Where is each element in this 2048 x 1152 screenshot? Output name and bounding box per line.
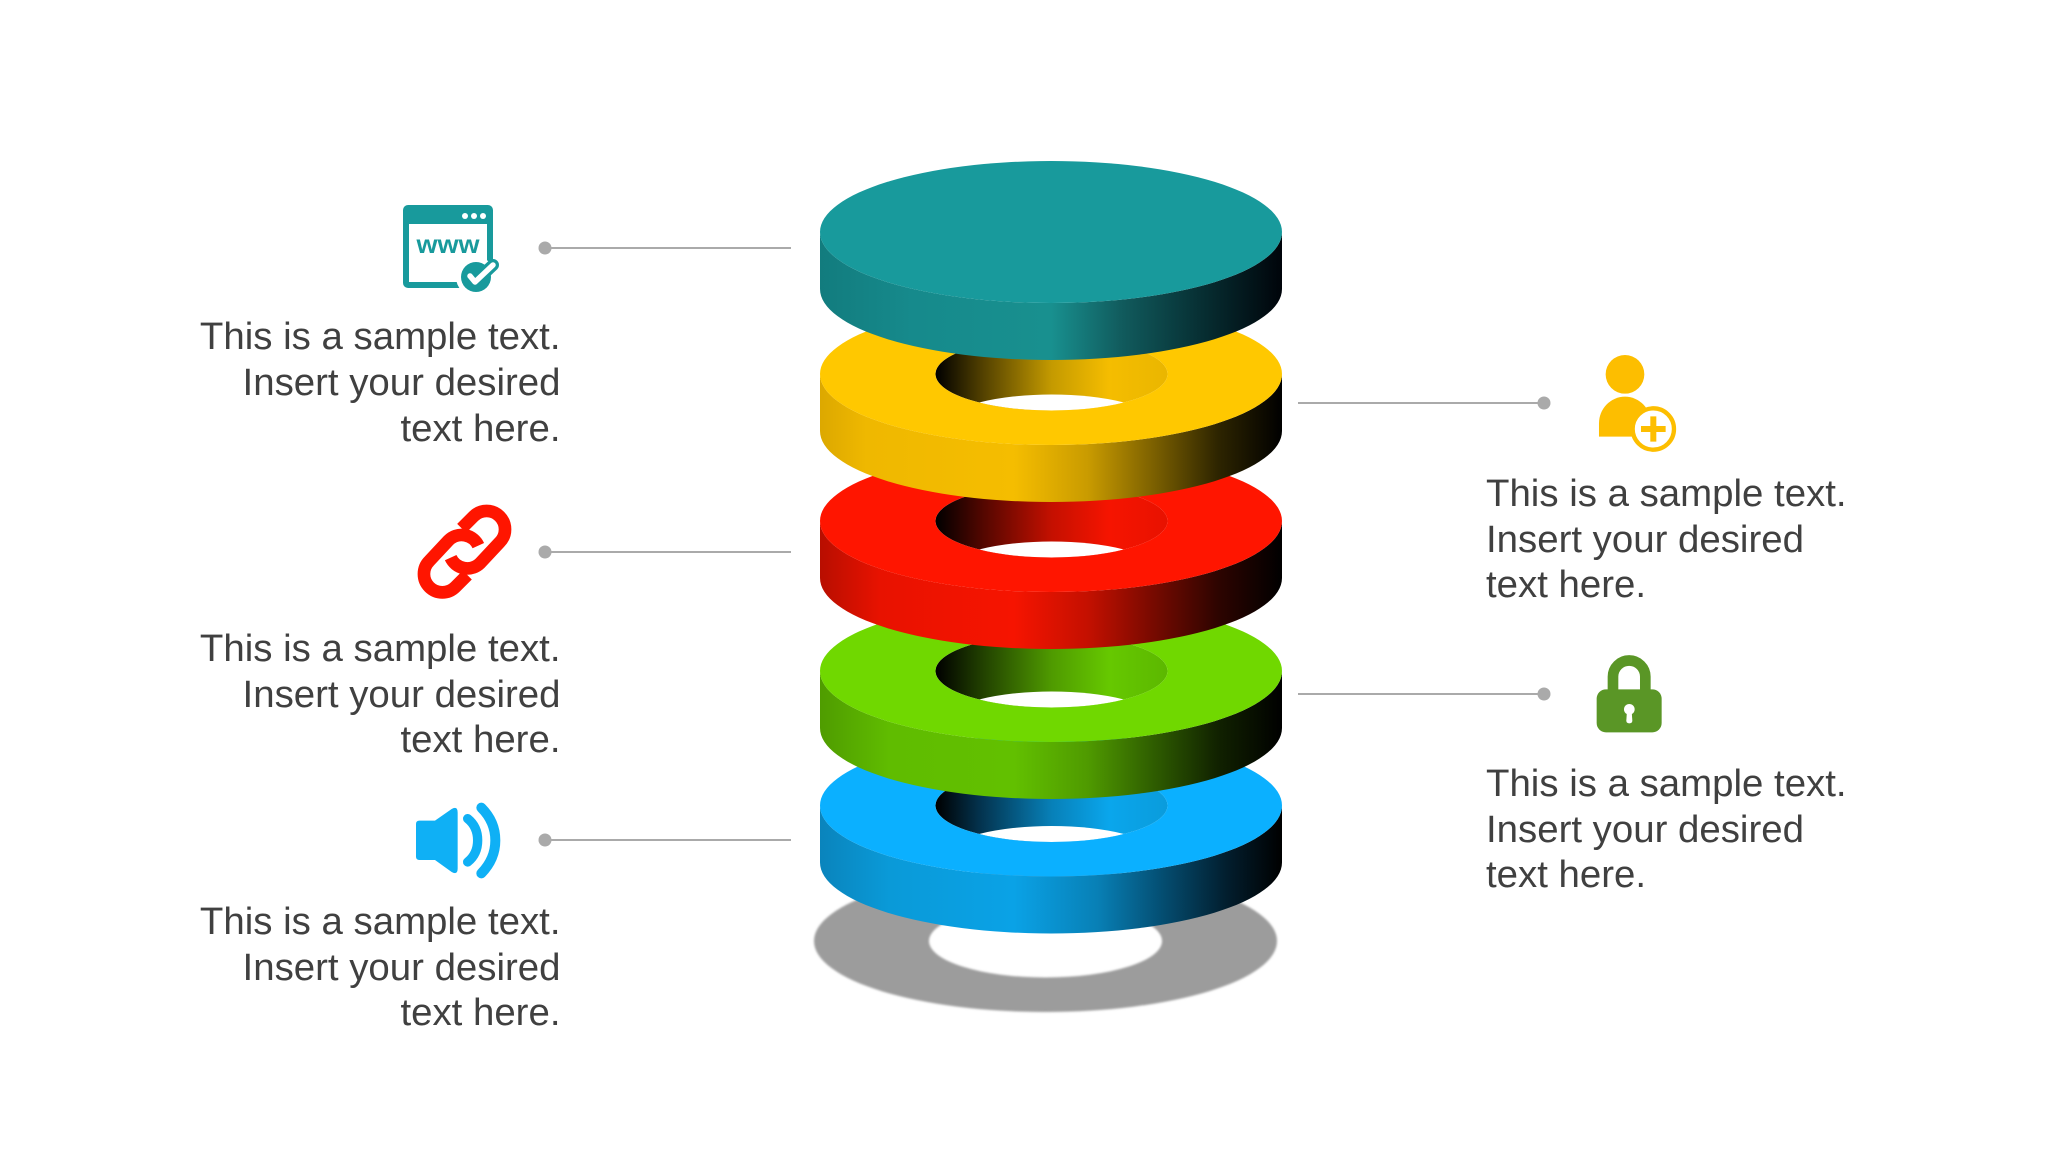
text block: www: Insert your desired [243, 361, 560, 404]
text block: speaker: This is a sample text. [200, 900, 560, 943]
ring: green [820, 600, 1282, 799]
text block: lock: Insert your desired [1486, 808, 1804, 851]
disc: teal top [820, 161, 1282, 360]
text block: user [1486, 472, 1847, 606]
icon: add user [1599, 355, 1674, 450]
text block: user: Insert your desired [1486, 518, 1804, 561]
ring: yellow [820, 303, 1282, 502]
text block: lock [1486, 762, 1847, 896]
text block: speaker: Insert your desired [243, 946, 560, 989]
text block: link: text here. [400, 718, 560, 761]
icon: speaker [416, 808, 495, 873]
ring: red [820, 450, 1282, 649]
text block: lock: This is a sample text. [1486, 762, 1847, 805]
connector: link [538, 546, 791, 558]
text block: speaker: text here. [400, 991, 560, 1034]
connector: speaker [538, 834, 791, 846]
text block: lock: text here. [1486, 853, 1646, 896]
icon: chain link [424, 511, 505, 592]
connector: www [538, 242, 791, 254]
ground shadow [814, 870, 1277, 1012]
text block: link: This is a sample text. [200, 627, 560, 670]
text block: www: text here. [400, 407, 560, 450]
text block: speaker [200, 900, 560, 1034]
text block: www: This is a sample text. [200, 315, 560, 358]
connector: lock [1298, 688, 1550, 700]
ring: blue [820, 734, 1282, 934]
text block: www [200, 315, 560, 450]
text block: user: text here. [1486, 563, 1646, 606]
stacked rings diagram [814, 161, 1282, 1012]
text block: link [200, 627, 560, 761]
connector: user [1298, 396, 1550, 410]
text block: user: This is a sample text. [1486, 472, 1847, 515]
icon: www browser window with check: www [415, 231, 480, 259]
icon: www browser window with check [403, 205, 496, 297]
text block: link: Insert your desired [243, 673, 560, 716]
icon: padlock [1597, 660, 1662, 732]
